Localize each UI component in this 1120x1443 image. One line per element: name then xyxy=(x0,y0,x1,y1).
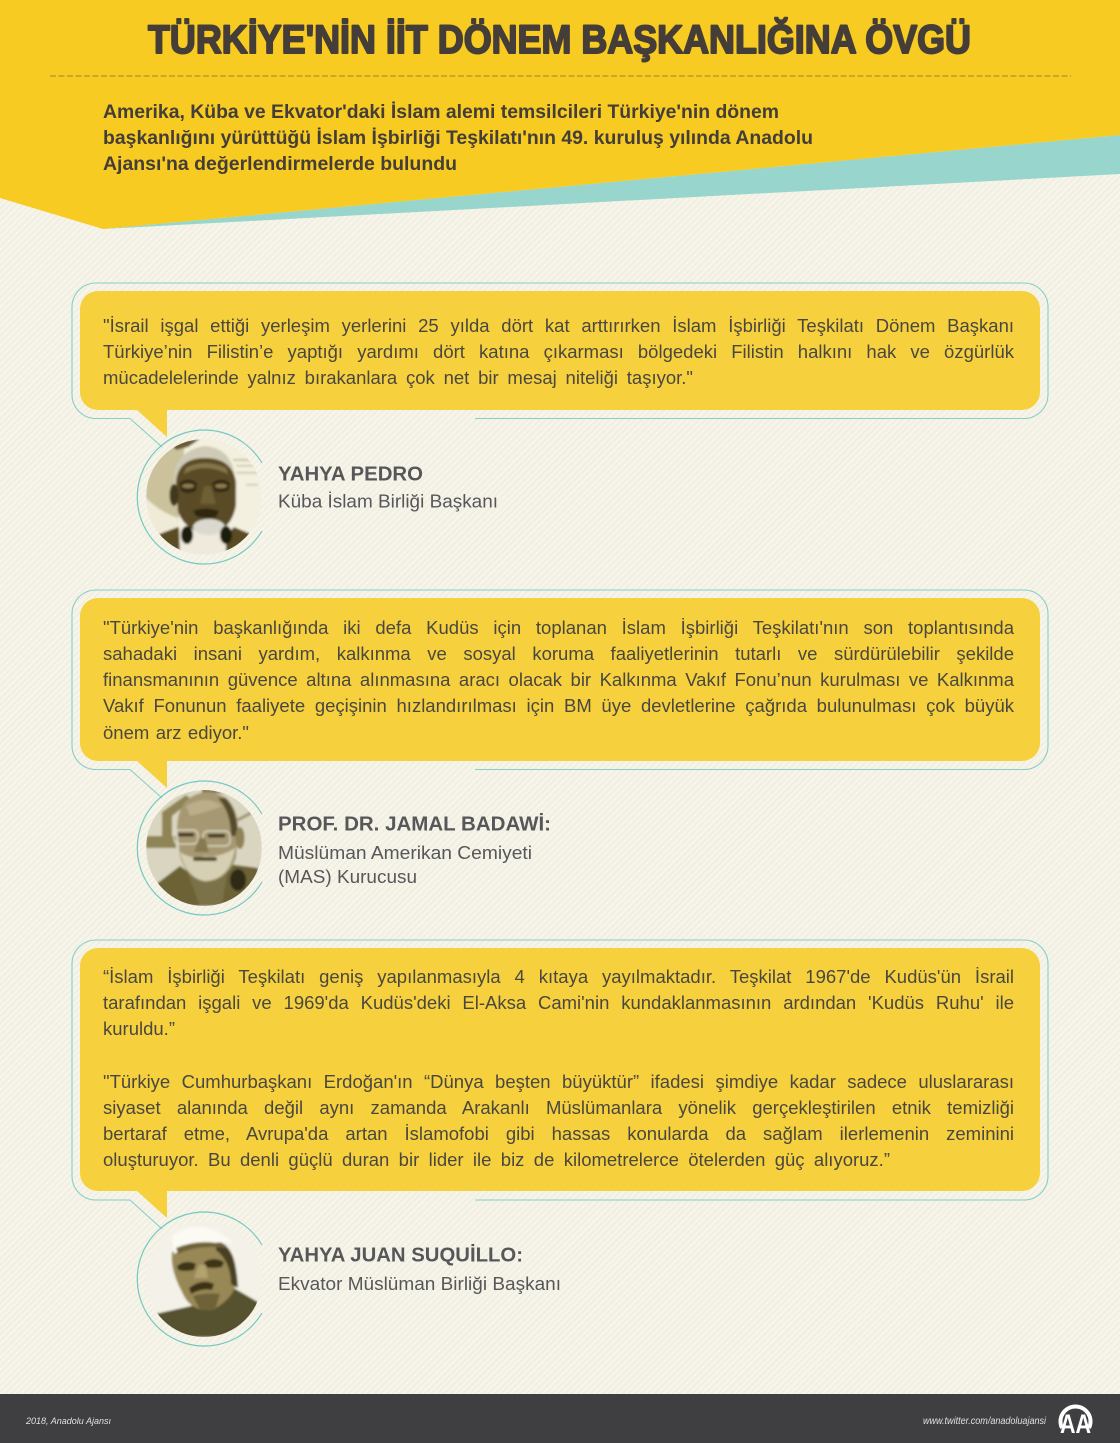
footer credit: 2018, Anadolu Ajansı xyxy=(25,1416,111,1427)
quote text 3: "Türkiye Cumhurbaşkanı Erdoğan'ın “Dünya beşten büyüktür” ifadesi şimdiye kadar sadece uluslararası xyxy=(103,1071,1014,1092)
quote text 2: "Türkiye'nin başkanlığında iki defa Kudüs için toplanan İslam İşbirliği Teşkilatı'nın son toplantısında xyxy=(103,617,1014,638)
icon: AA logo: AA xyxy=(1060,1409,1091,1439)
teal accent wedge xyxy=(103,135,1120,229)
footer twitter url: www.twitter.com/anadoluajansi xyxy=(923,1416,1047,1427)
header banner xyxy=(0,0,1120,229)
panel: Yahya Juan Suquillo quote: YAHYA JUAN SUQUİLLO: xyxy=(278,1244,523,1266)
subtitle: başkanlığını yürüttüğü İslam İşbirliği Teşkilatı'nın 49. kuruluş yılında Anadolu xyxy=(103,126,813,149)
quote text 3: siyaset alanında değil aynı zamanda Arakanlı Müslümanlara yönelik gerçekleştirilen etnik temizliği xyxy=(103,1097,1014,1118)
subtitle: Ajansı'na değerlendirmelerde bulundu xyxy=(103,153,457,175)
panel: Yahya Pedro quote: YAHYA PEDRO xyxy=(278,462,423,486)
quote text 1: "İsrail işgal ettiği yerleşim yerlerini 25 yılda dört kat arttırırken İslam İşbirliği Teşkilatı Dönem Başkanı xyxy=(103,315,1014,336)
quote text 1: mücadelelerinde yalnız bırakanlara çok net bir mesaj niteliği taşıyor." xyxy=(103,367,693,388)
title: TÜRKİYE'NİN İİT DÖNEM BAŞKANLIĞINA ÖVGÜ xyxy=(148,18,971,62)
quote text 3 xyxy=(103,966,1014,1170)
portrait: Yahya Pedro xyxy=(137,430,262,564)
quote text 3: “İslam İşbirliği Teşkilatı geniş yapılanmasıyla 4 kıtaya yayılmaktadır. Teşkilat 1967'de Kudüs'ün İsrail xyxy=(103,966,1014,987)
quote text 2: sahadaki insani yardım, kalkınma ve sosyal koruma faaliyetlerinin tutarlı ve sürdürülebilir şekilde xyxy=(103,643,1014,664)
panel: Jamal Badawi quote xyxy=(71,590,1049,916)
quote text 3: bertaraf etme, Avrupa'da artan İslamofobi gibi hassas konularda da sağlam ilerlemenin zeminini xyxy=(103,1123,1014,1144)
portrait: Yahya Juan Suquillo xyxy=(137,1212,262,1346)
quote text 2 xyxy=(103,617,1014,743)
panel: Jamal Badawi quote: Müslüman Amerikan Cemiyeti xyxy=(278,842,532,863)
portrait: Jamal Badawi xyxy=(137,781,262,915)
panel: Jamal Badawi quote: (MAS) Kurucusu xyxy=(278,866,417,887)
speech bubble 2 xyxy=(71,590,1049,916)
speaker name and role 3 xyxy=(278,1244,561,1294)
quote text 2: Vakıf Fonunun faaliyete geçişinin hızlandırılması için BM üye devletlerine çağrıda bulunulması çok büyük xyxy=(103,695,1014,716)
speech bubble 3 xyxy=(71,940,1049,1347)
subtitle: Amerika, Küba ve Ekvator'daki İslam alemi temsilcileri Türkiye'nin dönem xyxy=(103,100,779,123)
quote text 1 xyxy=(103,315,1014,388)
speaker name and role 2 xyxy=(278,812,551,887)
panel: Yahya Juan Suquillo quote xyxy=(71,940,1049,1347)
panel: Yahya Pedro quote: Küba İslam Birliği Başkanı xyxy=(278,490,498,512)
quote text 3: tarafından işgali ve 1969'da Kudüs'deki El-Aksa Cami'nin kundaklanmasının ardından 'Kudüs Ruhu' ile xyxy=(103,992,1014,1013)
speaker name and role 1 xyxy=(278,462,498,512)
subtitle xyxy=(103,100,813,175)
footer bar xyxy=(0,1394,1120,1443)
panel: Yahya Pedro quote xyxy=(71,282,1049,565)
quote text 3: kuruldu.” xyxy=(103,1018,175,1039)
yellow header shape xyxy=(0,0,1120,229)
quote text 2: finansmanının güvence altına alınmasına aracı olacak bir Kalkınma Vakıf Fonu’nun kurulması ve Kalkınma xyxy=(103,669,1014,690)
panel: Yahya Juan Suquillo quote: Ekvator Müslüman Birliği Başkanı xyxy=(278,1273,561,1294)
quote text 3: oluşturuyor. Bu denli güçlü duran bir lider ile biz de kilometrelerce ötelerden güç alıyoruz.” xyxy=(103,1149,890,1170)
panel: Jamal Badawi quote: PROF. DR. JAMAL BADAWİ: xyxy=(278,812,551,836)
quote text 2: önem arz ediyor." xyxy=(103,722,249,743)
quote text 1: Türkiye’nin Filistin’e yaptığı yardımı dört katına çıkarması bölgedeki Filistin halkını hak ve özgürlük xyxy=(103,341,1014,362)
speech bubble 1 xyxy=(71,282,1049,565)
